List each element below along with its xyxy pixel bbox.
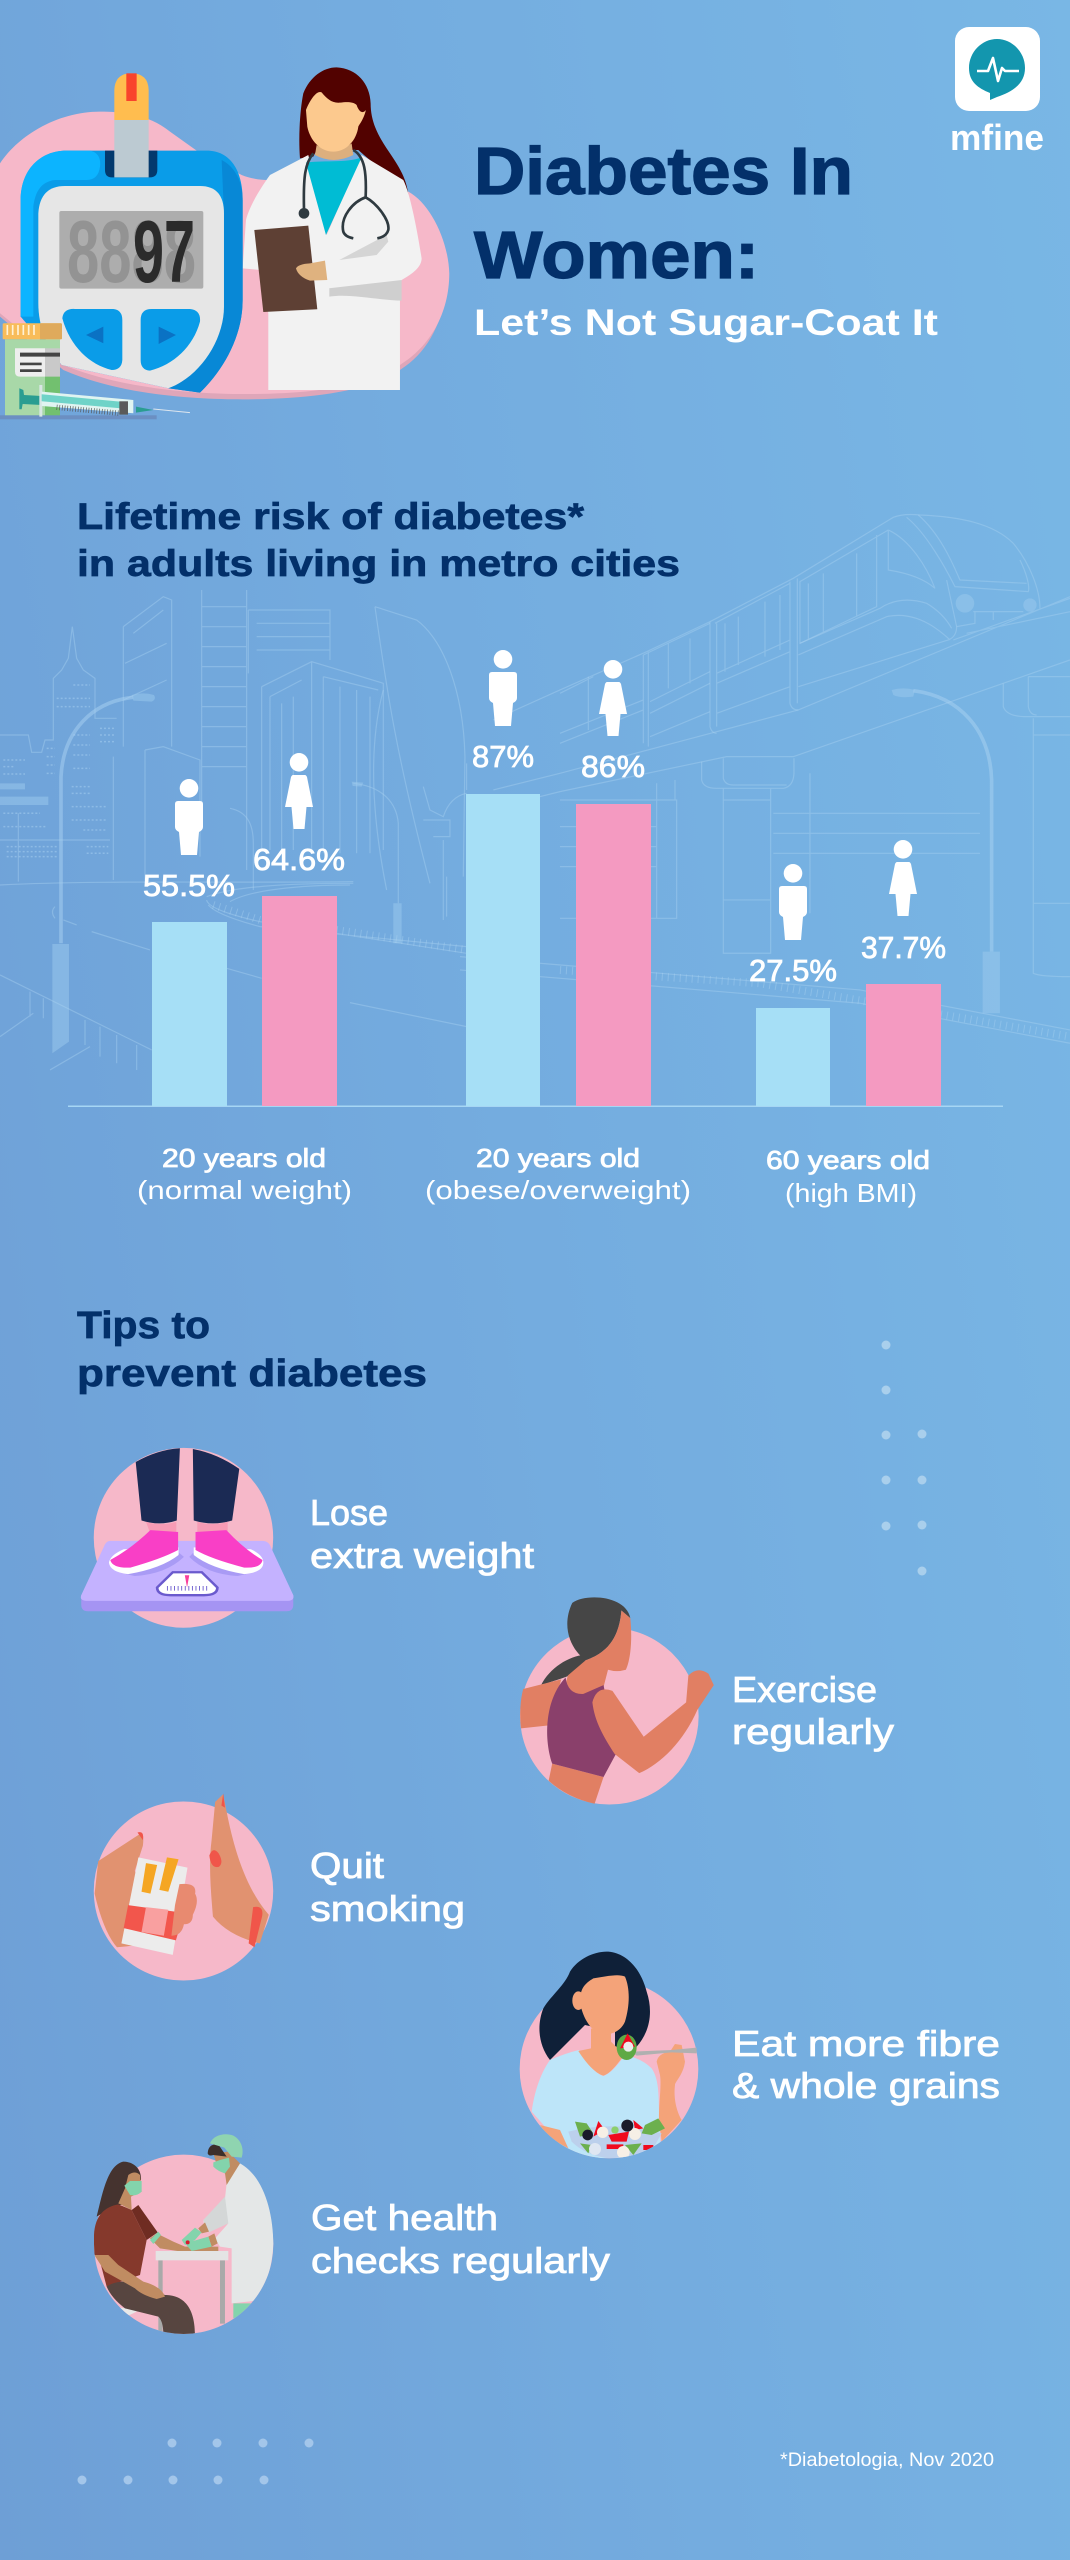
tip text: Lose — [310, 1492, 388, 1533]
glucose meter body — [21, 151, 243, 393]
tip text: Exercise — [732, 1669, 877, 1710]
background metro train and viaduct, right half — [460, 515, 1070, 1043]
glucose test strip — [114, 73, 149, 177]
main lamp post left — [61, 697, 133, 943]
tip 1: lose extra weight — [81, 1448, 534, 1628]
header illustration: glucose meter and doctor — [0, 67, 449, 419]
tip 3: quit smoking — [94, 1793, 465, 1981]
group: 20 years old obese or overweight: 87% — [472, 739, 534, 774]
tip 5: get health checks regularly — [94, 2134, 610, 2335]
tip text: regularly — [732, 1711, 894, 1752]
category labels: (high BMI) — [785, 1178, 917, 1208]
tip text — [311, 2197, 610, 2281]
icon: chat bubble with heartbeat — [969, 39, 1025, 100]
tip text: Get health — [311, 2197, 498, 2238]
medicine bottle — [3, 323, 62, 417]
tip text: & whole grains — [732, 2065, 1000, 2106]
icon: woman eating salad — [520, 1952, 698, 2159]
group: 20 years old obese or overweight — [466, 650, 651, 1106]
heading: lifetime risk: Lifetime risk of diabetes* — [77, 496, 585, 537]
group: 60 years old high BMI: 37.7% — [861, 930, 946, 965]
tip text — [732, 2023, 1000, 2106]
tip text — [732, 1669, 894, 1752]
heading: tips to prevent diabetes: Tips to — [77, 1305, 210, 1347]
category labels: 60 years old — [766, 1145, 930, 1175]
syringe — [0, 385, 190, 419]
lamp post right — [913, 691, 992, 952]
category labels: 20 years old — [162, 1143, 326, 1173]
heading: tips to prevent diabetes: prevent diabetes — [77, 1353, 427, 1395]
tip 2: exercise regularly — [520, 1597, 894, 1805]
tip text: Quit — [310, 1845, 384, 1886]
bar chart — [68, 650, 1003, 1208]
axis line — [68, 1106, 1003, 1107]
meter display digits: 97 — [133, 202, 195, 301]
background city line art, left half — [0, 590, 467, 1070]
group: 20 years old obese or overweight: 86% — [581, 749, 645, 784]
meter display digits — [67, 202, 196, 301]
tip 4: eat more fibre and whole grains — [520, 1952, 1000, 2159]
group: 20 years old normal weight — [143, 753, 345, 1106]
group: 20 years old normal weight: 64.6% — [253, 842, 345, 877]
decorative dots right — [882, 1340, 926, 1576]
tip text: extra weight — [310, 1535, 534, 1576]
group: 60 years old high BMI: 27.5% — [749, 953, 837, 988]
category labels — [137, 1143, 930, 1208]
category labels: (normal weight) — [137, 1175, 352, 1205]
group: 20 years old normal weight: 55.5% — [143, 868, 235, 903]
tip text: Eat more fibre — [732, 2023, 1000, 2064]
category labels: (obese/overweight) — [425, 1175, 691, 1205]
icon: woman running — [520, 1597, 714, 1805]
heading: tips to prevent diabetes — [77, 1305, 427, 1395]
tip text: checks regularly — [311, 2240, 610, 2281]
tip text — [310, 1492, 534, 1576]
title: Women: — [474, 218, 759, 293]
logo: mfine — [950, 27, 1044, 158]
heading: lifetime risk — [77, 496, 680, 584]
group: 60 years old high BMI — [749, 840, 946, 1106]
icon: feet on weighing scale — [81, 1448, 293, 1628]
doctor — [243, 67, 422, 390]
category labels: 20 years old — [476, 1143, 640, 1173]
footnote: *Diabetologia, Nov 2020 — [780, 2450, 994, 2471]
title: Let’s Not Sugar-Coat It — [474, 302, 938, 343]
icon: hand refusing cigarettes — [94, 1793, 273, 1981]
pink blob behind illustration — [0, 112, 449, 399]
tip text — [310, 1845, 465, 1929]
logo: mfine: mfine — [950, 117, 1044, 158]
meter display digits: 8888 — [67, 202, 196, 301]
title — [474, 134, 938, 343]
icon: doctor checking patient — [94, 2134, 273, 2335]
heading: lifetime risk: in adults living in metro cities — [77, 543, 680, 584]
title: Diabetes In — [474, 134, 853, 209]
tip text: smoking — [310, 1888, 465, 1929]
decorative dots bottom — [78, 2438, 314, 2484]
